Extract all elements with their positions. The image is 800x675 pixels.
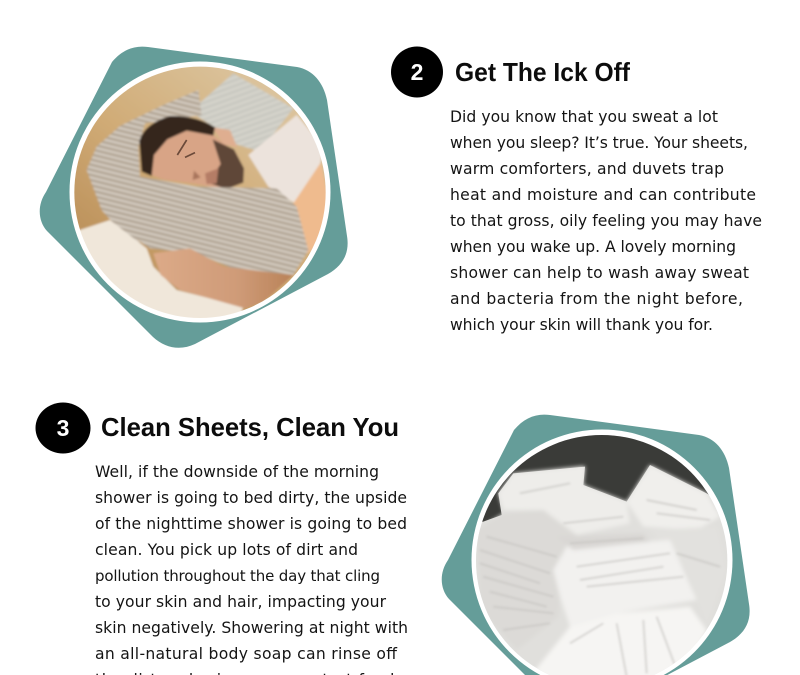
badge: number 2: 2 bbox=[411, 59, 423, 85]
text block: section 3 body: an all-natural body soap can rinse off bbox=[95, 645, 398, 663]
text block: section 2 body: warm comforters, and duvets trap bbox=[450, 160, 724, 178]
teal pentagon backdrop bbox=[40, 47, 348, 348]
text block: section 2 body: and bacteria from the night before, bbox=[450, 290, 743, 308]
text block: section 3 body: to your skin and hair, impacting your bbox=[95, 593, 387, 611]
photo: man sleeping on striped pillow bbox=[70, 63, 333, 327]
text block: section 2 body: shower can help to wash away sweat bbox=[450, 264, 749, 282]
text block: section 2 body: when you sleep? It’s true. Your sheets, bbox=[450, 134, 748, 152]
text block: section 3 body: skin negatively. Showering at night with bbox=[95, 619, 408, 637]
text block: section 2 body: to that gross, oily feeling you may have bbox=[450, 212, 762, 230]
text block: section 2 body bbox=[450, 108, 762, 334]
text block: section 3 body: shower is going to bed dirty, the upside bbox=[95, 489, 407, 507]
white ring bbox=[70, 62, 330, 322]
white ring bbox=[472, 430, 732, 675]
photo: rumpled white bedding bbox=[470, 430, 733, 675]
panel: image sleeping man bbox=[40, 47, 348, 348]
text block: section 2 body: when you wake up. A lovely morning bbox=[450, 238, 736, 256]
text block: section 3 body: Well, if the downside of the morning bbox=[95, 463, 379, 481]
text block: section 3 body: of the nighttime shower is going to bed bbox=[95, 515, 407, 533]
text block: section 3 body: clean. You pick up lots of dirt and bbox=[95, 541, 358, 559]
heading: Get The Ick Off: Get The Ick Off bbox=[455, 57, 630, 87]
panel: image unmade bed bbox=[442, 415, 750, 675]
badge: number 3: 3 bbox=[57, 415, 69, 441]
badge: number 3 bbox=[36, 402, 90, 454]
text block: section 2 body: which your skin will thank you for. bbox=[450, 316, 713, 334]
badge: number 2 bbox=[391, 46, 443, 98]
heading: Clean Sheets, Clean You: Clean Sheets, Clean You bbox=[101, 412, 399, 442]
teal pentagon backdrop bbox=[442, 415, 750, 675]
text block: section 2 body: Did you know that you sweat a lot bbox=[450, 108, 718, 126]
text block: section 3 body: pollution throughout the day that cling bbox=[95, 567, 380, 585]
text block: section 2 body: heat and moisture and can contribute bbox=[450, 186, 756, 204]
text block: section 3 body bbox=[95, 463, 408, 675]
